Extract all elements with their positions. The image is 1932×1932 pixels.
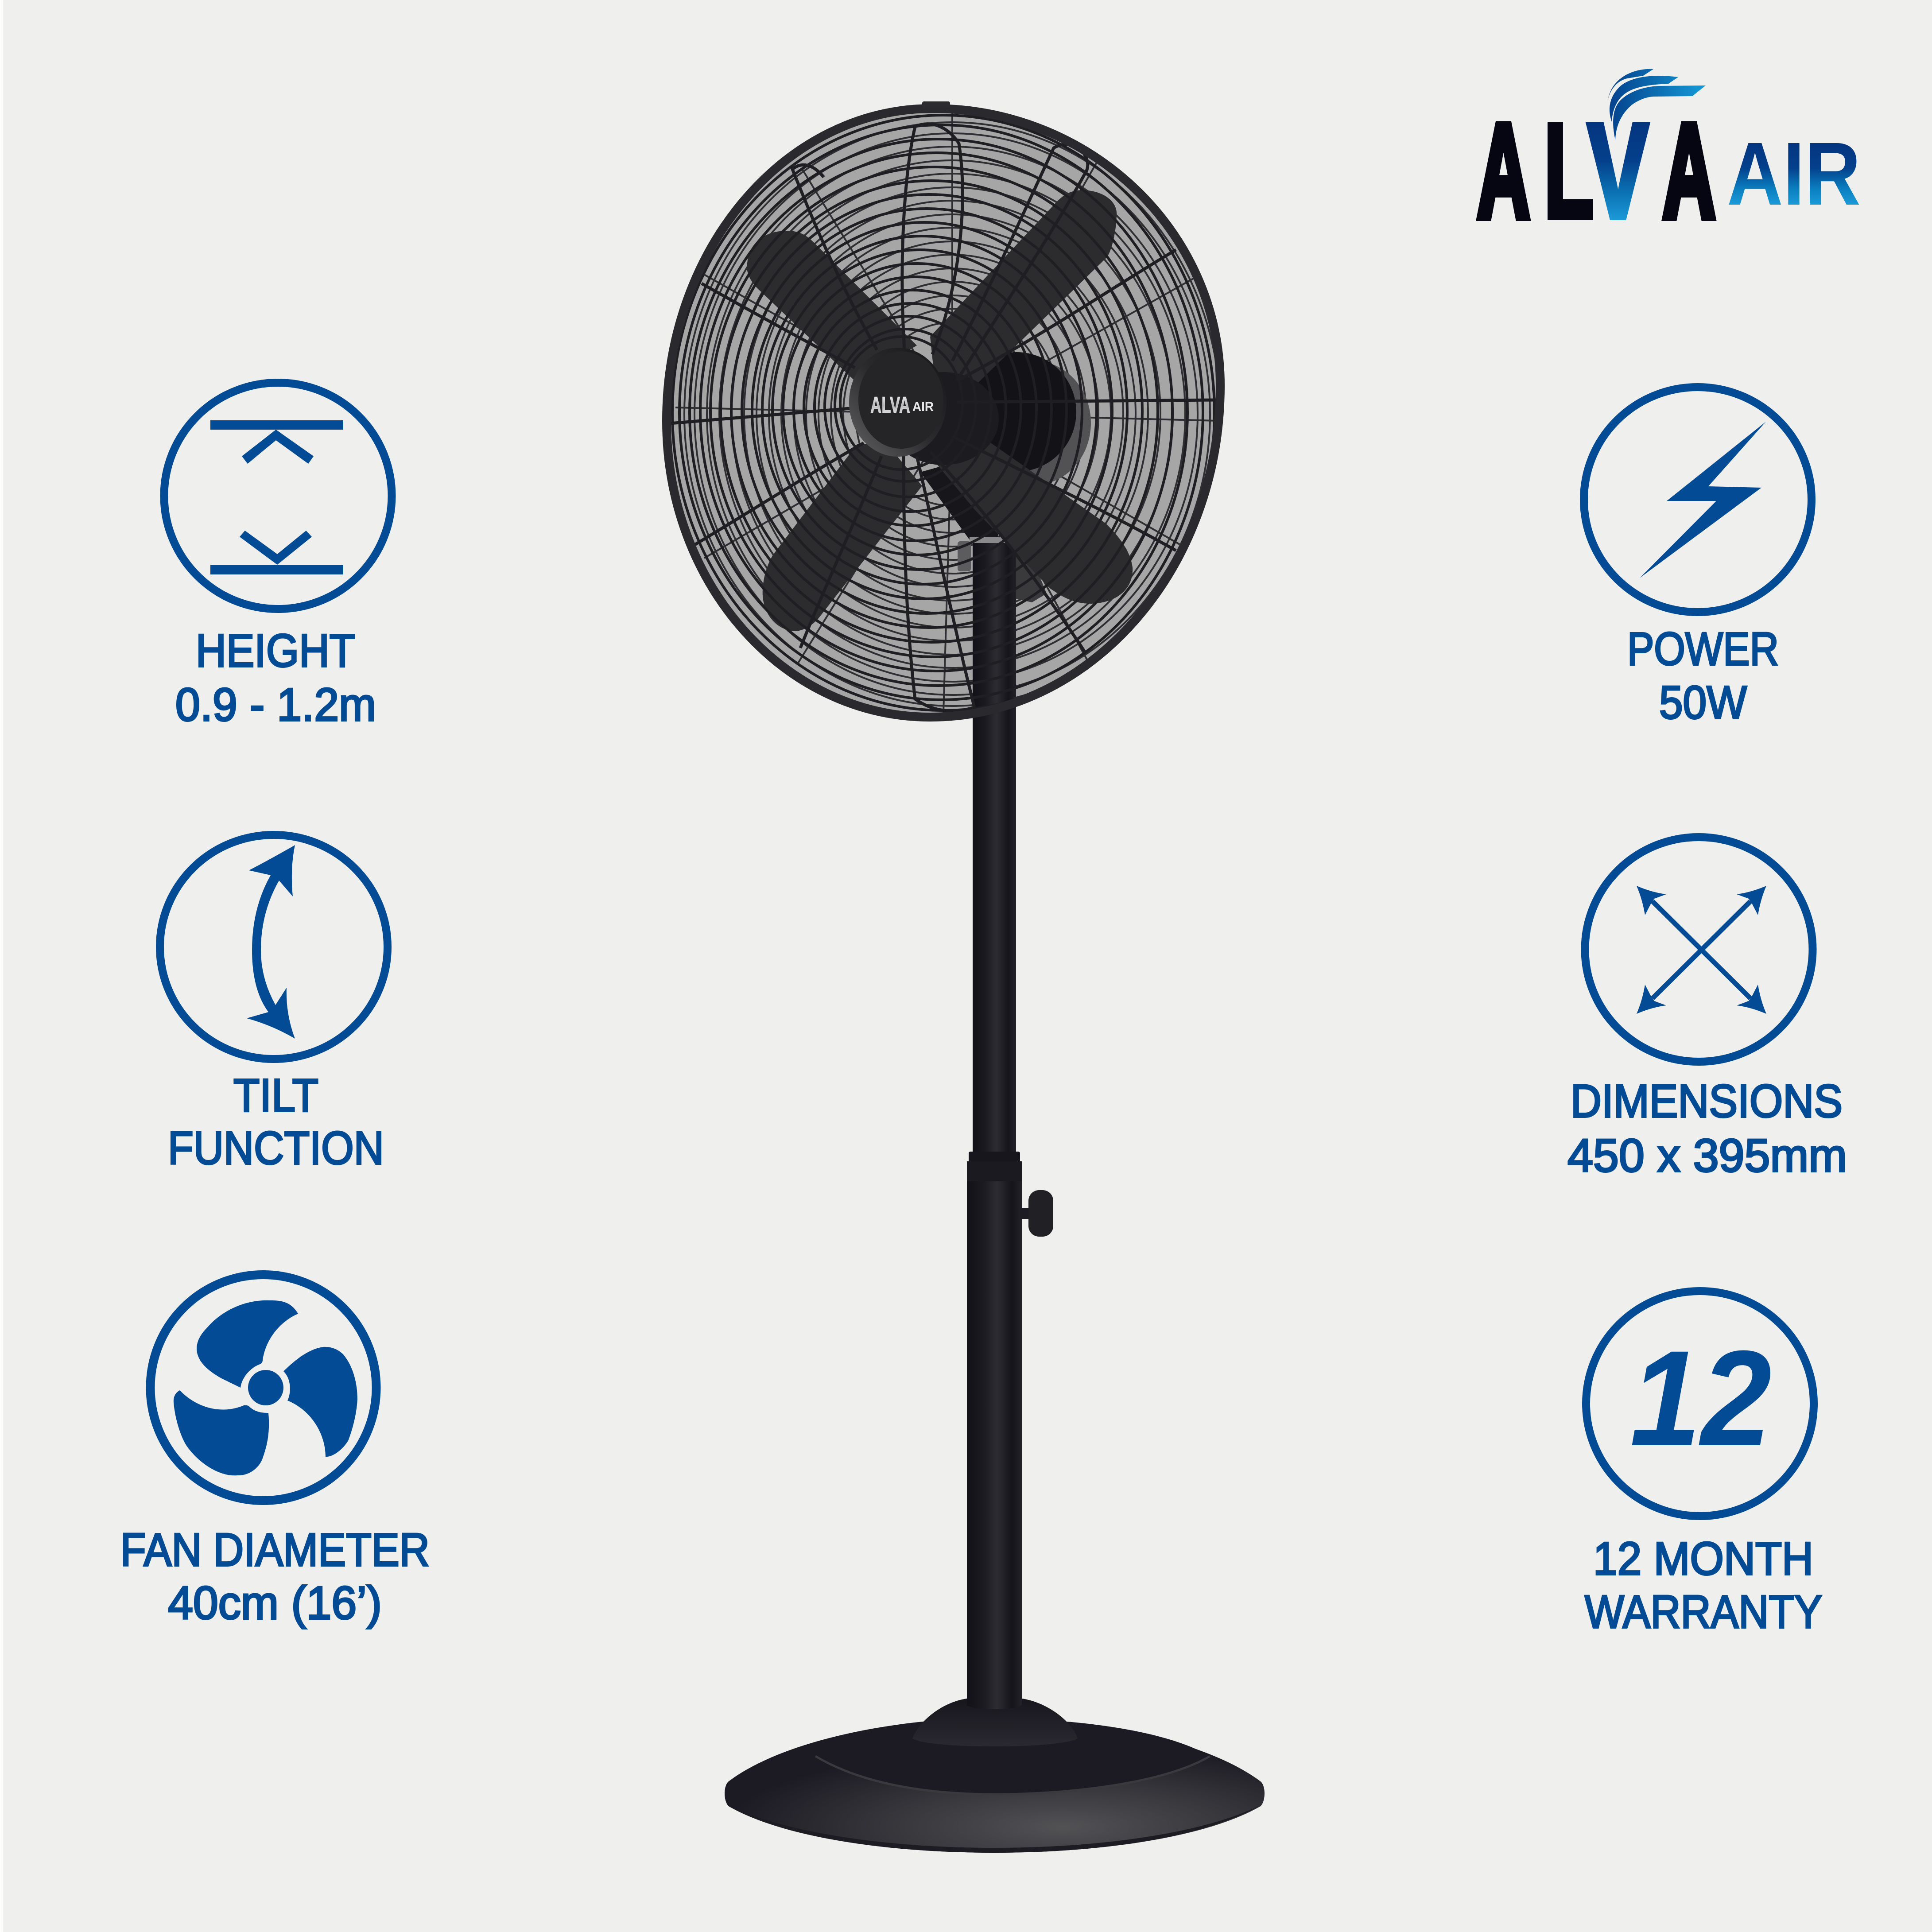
logo wordmark ALVA bbox=[1477, 96, 1715, 245]
feature: fan diameter bbox=[120, 1275, 430, 1629]
label: height bbox=[175, 625, 376, 731]
tilt bracket bbox=[920, 461, 1047, 602]
fan hub cap bbox=[849, 348, 947, 457]
label: warranty: WARRANTY bbox=[1585, 1586, 1822, 1638]
icon: height bbox=[164, 383, 392, 609]
label: power bbox=[1627, 623, 1779, 729]
blade: upper left bbox=[747, 231, 917, 381]
label: power: 50W bbox=[1659, 677, 1747, 729]
fan blades bbox=[747, 190, 1133, 631]
icon: tilt bbox=[160, 835, 388, 1059]
hub logo: ALVA bbox=[870, 392, 910, 418]
feature: tilt function bbox=[160, 835, 388, 1174]
label: tilt function: TILT bbox=[233, 1070, 318, 1121]
logo wordmark ALVA: A bbox=[1477, 96, 1530, 245]
label: dimensions bbox=[1567, 1075, 1847, 1182]
front grille rings bbox=[672, 115, 1214, 710]
label: fan diameter bbox=[120, 1524, 430, 1629]
icon: lightning bolt bbox=[1584, 387, 1812, 612]
label: warranty bbox=[1585, 1533, 1822, 1638]
label: tilt function bbox=[168, 1070, 384, 1174]
label: power: POWER bbox=[1627, 623, 1779, 675]
motor housing bbox=[957, 352, 1091, 485]
fan cage interior bbox=[667, 109, 1220, 717]
label: height: HEIGHT bbox=[196, 625, 355, 677]
product: pedestal fan bbox=[667, 101, 1265, 1853]
brand logo bbox=[1477, 69, 1861, 245]
logo wordmark AIR: AIR bbox=[1727, 124, 1861, 224]
logo wordmark ALVA: V bbox=[1588, 96, 1649, 245]
round base bbox=[725, 1683, 1265, 1853]
label: dimensions: 450 x 395mm bbox=[1567, 1130, 1847, 1182]
top handle bbox=[922, 101, 950, 108]
blade: lower left bbox=[763, 443, 922, 631]
label: fan diameter: 40cm (16’) bbox=[168, 1577, 382, 1629]
label: fan diameter: FAN DIAMETER bbox=[120, 1524, 430, 1576]
logo swoosh bbox=[1608, 69, 1706, 140]
cage rim bbox=[667, 109, 1220, 717]
base dome bbox=[912, 1698, 1078, 1746]
hub logo: AIR bbox=[912, 400, 934, 414]
icon: fan bbox=[151, 1275, 376, 1501]
rear grille wires bbox=[675, 111, 1220, 713]
pole below rim bbox=[973, 721, 1016, 1152]
raised base step bbox=[815, 1719, 1210, 1794]
lower pole bbox=[967, 1181, 1022, 1708]
feature: power bbox=[1584, 387, 1812, 729]
feature: dimensions bbox=[1567, 837, 1847, 1182]
height collar bbox=[967, 1152, 1022, 1182]
pole foot bbox=[967, 1683, 1022, 1709]
label: warranty: 12 MONTH bbox=[1593, 1533, 1813, 1585]
blade: lower right bbox=[930, 425, 1133, 604]
logo wordmark ALVA: L bbox=[1544, 96, 1594, 245]
label: tilt function: FUNCTION bbox=[168, 1122, 384, 1174]
height adjustment knob bbox=[1020, 1190, 1053, 1237]
logo wordmark ALVA: A bbox=[1663, 96, 1715, 245]
icon: 12 badge bbox=[1586, 1291, 1814, 1516]
feature: warranty bbox=[1585, 1291, 1822, 1638]
blade: upper right bbox=[930, 190, 1117, 421]
label: dimensions: DIMENSIONS bbox=[1571, 1075, 1843, 1127]
icon: 12 badge: 12 bbox=[1630, 1323, 1772, 1474]
blade hub shadow bbox=[888, 372, 999, 465]
upper pole bbox=[973, 543, 1016, 1154]
feature: height bbox=[164, 383, 392, 731]
front grille spokes bbox=[670, 124, 1216, 711]
label: height: 0.9 - 1.2m bbox=[175, 679, 376, 731]
icon: four-way arrows bbox=[1585, 837, 1812, 1062]
